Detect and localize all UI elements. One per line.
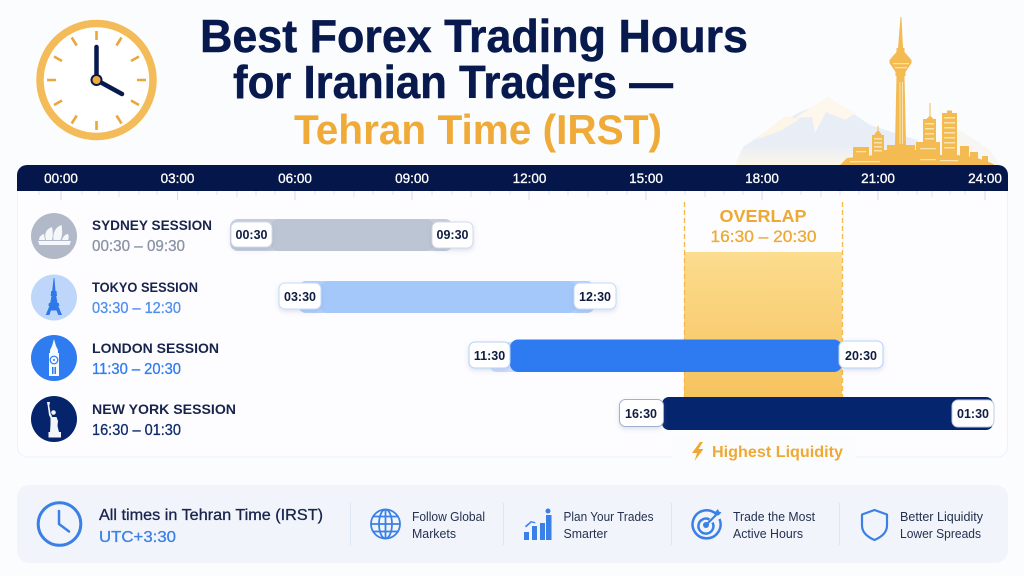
feature: follow global markets — [371, 510, 485, 541]
label: Tokyo name: TOKYO SESSION — [92, 279, 198, 295]
label: London hours: 11:30 – 20:30 — [92, 361, 181, 378]
illustration: Tehran skyline with Mount Damavand — [735, 17, 1000, 165]
title: Tehran Time (IRST) — [294, 106, 662, 153]
timeline header: 00:00 — [44, 171, 78, 186]
text: time zone note: UTC+3:30 — [99, 529, 176, 546]
bar: London — [469, 340, 883, 372]
title: for Iranian Traders — — [233, 56, 673, 108]
overlap zone: OVERLAP — [720, 206, 807, 226]
bar: Sydney — [230, 219, 473, 251]
panel: timeline body — [18, 180, 1008, 457]
title — [200, 10, 748, 153]
icon: clock — [40, 24, 153, 136]
icon: Tokyo Tower — [31, 274, 77, 320]
icon: Sydney Opera House — [31, 213, 77, 259]
overlap zone: 16:30 – 20:30 — [710, 228, 816, 246]
feature: plan your trades — [524, 508, 654, 541]
timeline header: 24:00 — [968, 171, 1002, 186]
session: Sydney — [31, 213, 473, 259]
icon: Statue of Liberty — [31, 396, 77, 442]
timeline header: 15:00 — [629, 171, 663, 186]
feature: better liquidity: Lower Spreads — [900, 527, 981, 541]
feature: better liquidity — [862, 510, 984, 541]
bar: Sydney: 09:30 — [437, 228, 469, 242]
label: Sydney hours: 00:30 – 09:30 — [92, 238, 185, 255]
bar: London: 20:30 — [845, 349, 877, 363]
label: Tokyo hours: 03:30 – 12:30 — [92, 300, 181, 317]
bar: New York: 01:30 — [957, 407, 989, 421]
timeline header: 12:00 — [513, 171, 546, 186]
bar: Tokyo: 03:30 — [284, 290, 316, 304]
callout: highest liquidity — [672, 438, 856, 466]
session: New York — [31, 396, 994, 442]
overlap zone — [684, 202, 842, 430]
timeline header: 09:00 — [395, 171, 429, 186]
text: time zone note — [99, 507, 323, 546]
label: New York name: NEW YORK SESSION — [92, 401, 236, 417]
icon: lightning bolt — [692, 442, 704, 461]
bar: London: 11:30 — [474, 349, 505, 363]
timeline header: 21:00 — [861, 171, 895, 186]
feature: trade active hours: Active Hours — [733, 527, 803, 541]
feature: plan your trades: Smarter — [564, 527, 608, 541]
timeline header — [17, 165, 1008, 200]
bar: Tokyo — [279, 281, 616, 313]
feature: follow global markets: Follow Global — [412, 510, 485, 524]
timeline header: 03:00 — [161, 171, 194, 186]
timeline header: 06:00 — [278, 171, 312, 186]
title: Best Forex Trading Hours — [200, 10, 748, 62]
feature: trade active hours — [693, 509, 816, 541]
feature: plan your trades: Plan Your Trades — [564, 510, 654, 524]
icon: blue clock — [38, 503, 81, 545]
label: London name: LONDON SESSION — [92, 340, 219, 356]
feature: better liquidity: Better Liquidity — [900, 510, 984, 524]
callout: highest liquidity: Highest Liquidity — [712, 444, 843, 461]
bar: Tokyo: 12:30 — [579, 290, 611, 304]
feature: follow global markets: Markets — [412, 527, 456, 541]
label: New York hours: 16:30 – 01:30 — [92, 422, 181, 439]
bar: Sydney: 00:30 — [236, 228, 268, 242]
text: time zone note: All times in Tehran Time (IRST) — [99, 507, 323, 524]
label: Sydney name: SYDNEY SESSION — [92, 217, 212, 233]
session: London — [31, 335, 883, 381]
bar: New York: 16:30 — [625, 407, 657, 421]
bar: New York — [620, 397, 994, 430]
icon: Big Ben — [31, 335, 77, 381]
panel: footer — [17, 485, 1008, 563]
feature: trade active hours: Trade the Most — [733, 510, 816, 524]
session: Tokyo — [31, 274, 616, 320]
timeline header: 18:00 — [745, 171, 779, 186]
